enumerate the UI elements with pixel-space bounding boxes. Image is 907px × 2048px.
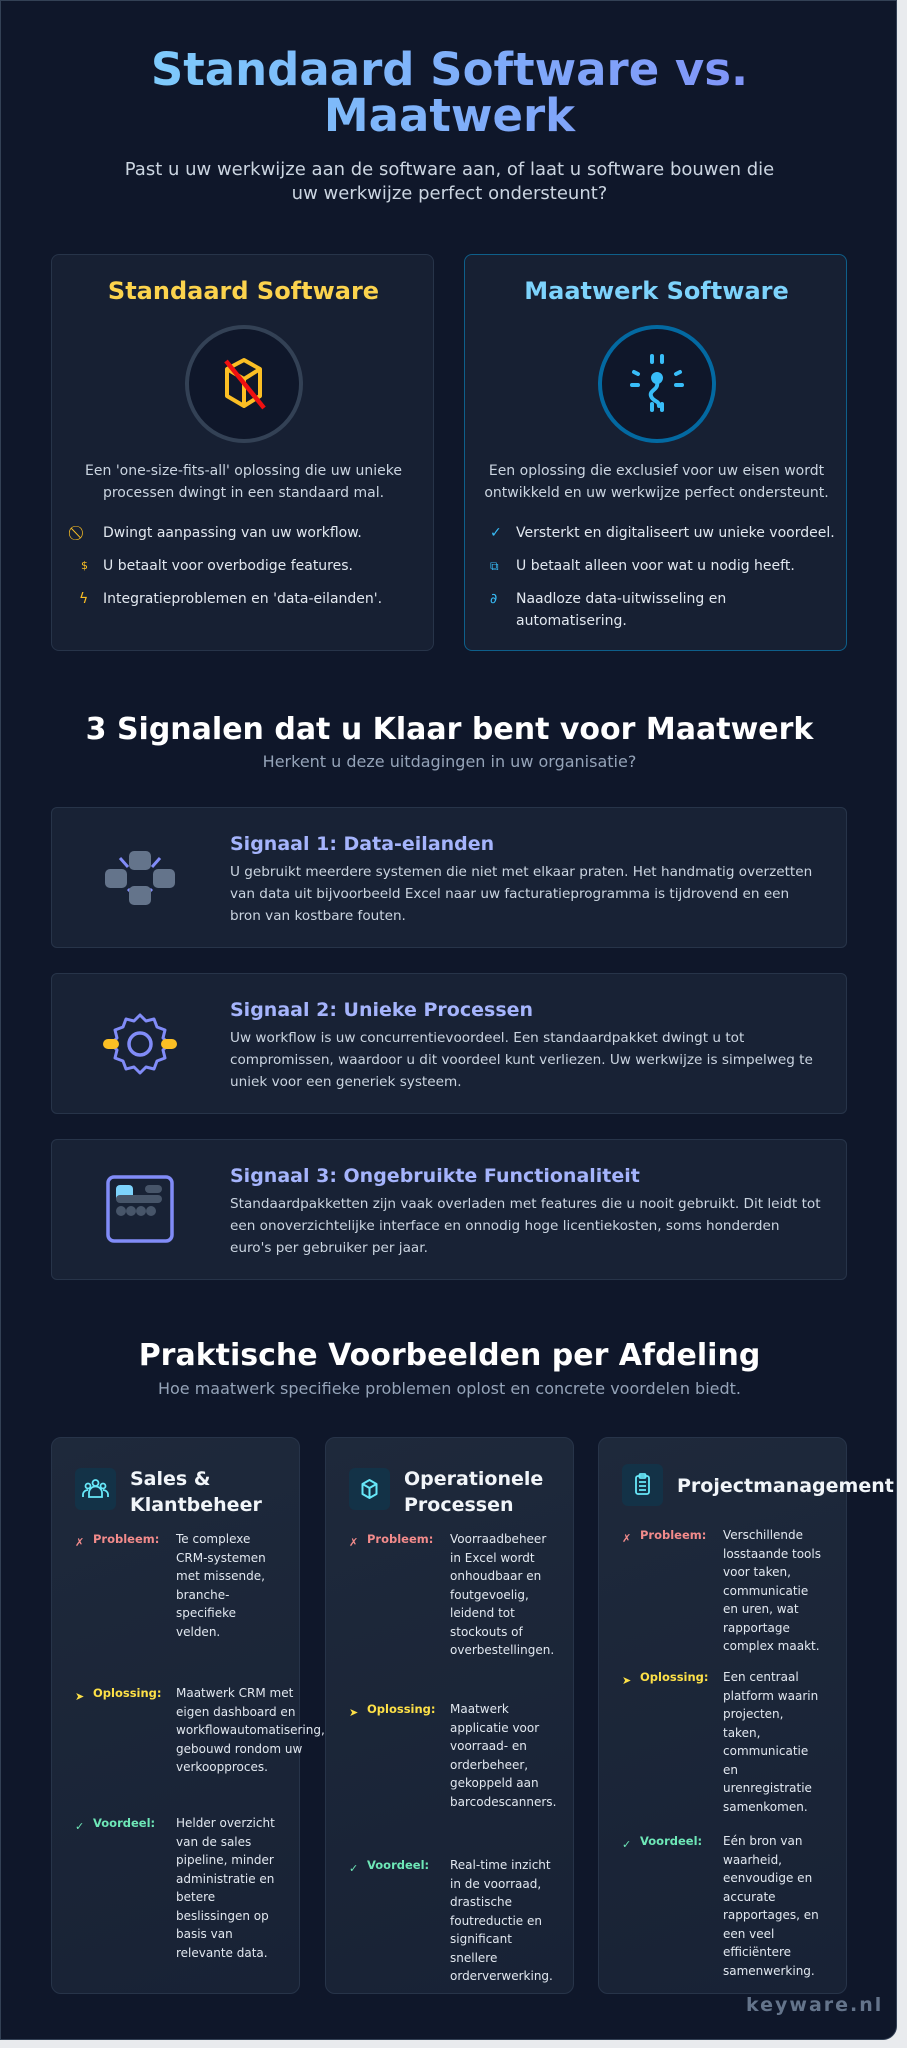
panel: projectmanagement: Projectmanagement [677, 1475, 894, 1497]
panel: sales: Oplossing: [93, 1686, 162, 1700]
panel: signaal 2: Uw workflow is uw concurrentievoordeel. Een standaardpakket dwingt u tot compromissen, waardoor u dit voordeel kunt verliezen. Uw werkwijze is simpelweg te uniek voor een generiek systeem. [230, 1030, 813, 1090]
icon: cluttered interface [106, 1175, 174, 1243]
panel: standaard software [51, 254, 434, 651]
panel: projectmanagement: Voordeel: [640, 1834, 702, 1848]
text: description: Een 'one-size-fits-all' oplossing die uw unieke processen dwingt in een standaard mal. [85, 463, 402, 501]
icon: clipboard [622, 1464, 663, 1506]
panel: signaal 1: U gebruikt meerdere systemen die niet met elkaar praten. Het handmatig overzetten van data uit bijvoorbeeld Excel naar uw facturatieprogramma is tijdrovend en een bron van kostbare fouten. [230, 864, 812, 924]
panel: sales: ➤ [75, 1690, 84, 1703]
list: voordelen: ∂ [490, 591, 497, 607]
panel: signaal 3 [51, 1139, 847, 1280]
heading: maatwerk: Maatwerk Software [524, 277, 789, 305]
panel: projectmanagement: Verschillende losstaande tools voor taken, communicatie en uren, wat rapportage complex maakt. [723, 1528, 821, 1653]
list: voordelen [490, 525, 835, 629]
panel: operationele processen [325, 1437, 574, 1994]
panel: sales [51, 1437, 300, 1994]
panel: sales: Helder overzicht van de sales pipeline, minder administratie en betere beslissingen op basis van relevante data. [176, 1816, 275, 1960]
panel: signaal 3: Signaal 3: Ongebruikte Functionaliteit [230, 1165, 640, 1187]
subheading: voorbeelden: Hoe maatwerk specifieke problemen oplost en concrete voordelen biedt. [158, 1379, 741, 1398]
panel: operationele processen: Oplossing: [367, 1702, 436, 1716]
list: nadelen: $ [81, 559, 88, 572]
list: nadelen: Dwingt aanpassing van uw workflow. [103, 525, 362, 541]
panel: signaal 2 [51, 973, 847, 1114]
panel: operationele processen: Voordeel: [367, 1858, 429, 1872]
panel: projectmanagement: Oplossing: [640, 1670, 709, 1684]
panel: sales: ✓ [75, 1820, 84, 1833]
panel: signaal 1 [51, 807, 847, 948]
panel: sales: Probleem: [93, 1532, 159, 1546]
panel: operationele processen: ✓ [349, 1862, 358, 1875]
heading: voorbeelden: Praktische Voorbeelden per Afdeling [139, 1338, 760, 1373]
panel: operationele processen: Processen [404, 1494, 514, 1516]
list: voordelen: ✓ [490, 525, 502, 541]
panel: projectmanagement: Een centraal platform waarin projecten, taken, communicatie en urenregistratie samenkomen. [723, 1670, 818, 1814]
panel: signaal 3: Standaardpakketten zijn vaak overladen met features die u nooit gebruikt. Dit leidt tot een onoverzichtelijke interface en onnodig hoge licentiekosten, soms honderden euro's per gebruiker per jaar. [230, 1196, 821, 1256]
footer: brand: keyware.nl [746, 1994, 883, 2016]
panel: projectmanagement: Probleem: [640, 1528, 706, 1542]
panel: projectmanagement: Eén bron van waarheid, eenvoudige en accurate rapportages, en een veel efficiëntere samenwerking. [723, 1834, 819, 1978]
icon: crossed box [185, 325, 303, 443]
panel: operationele processen: Maatwerk applicatie voor voorraad- en orderbeheer, gekoppeld aan barcodescanners. [450, 1702, 556, 1808]
panel: operationele processen: ✗ [349, 1536, 358, 1549]
panel: sales: Sales & [130, 1468, 210, 1490]
panel: sales: Maatwerk CRM met eigen dashboard en workflowautomatisering, gebouwd rondom uw verkoopproces. [176, 1686, 325, 1774]
panel: operationele processen: Voorraadbeheer in Excel wordt onhoudbaar en foutgevoelig, leidend tot stockouts of overbestellingen. [450, 1532, 554, 1657]
icon: custom [598, 325, 716, 443]
list: voordelen: Versterkt en digitaliseert uw unieke voordeel. [516, 525, 835, 541]
list: voordelen: ⧉ [490, 559, 499, 573]
panel: operationele processen: Real-time inzicht in de voorraad, drastische foutreductie en significant snellere orderverwerking. [450, 1858, 553, 1983]
heading: signalen: 3 Signalen dat u Klaar bent voor Maatwerk [86, 712, 813, 747]
icon: data islands [105, 851, 175, 905]
panel: maatwerk software [464, 254, 847, 651]
icon: gear [103, 1013, 177, 1075]
text: description: Een oplossing die exclusief voor uw eisen wordt ontwikkeld en uw werkwijze perfect ondersteunt. [484, 463, 829, 501]
subheading: signalen: Herkent u deze uitdagingen in uw organisatie? [263, 752, 636, 771]
subtitle: Past u uw werkwijze aan de software aan, of laat u software bouwen die uw werkwijze perfect ondersteunt? [125, 159, 774, 204]
panel: sales: ✗ [75, 1536, 84, 1549]
panel: operationele processen: ➤ [349, 1706, 358, 1719]
panel: sales: Klantbeheer [130, 1494, 262, 1516]
title: Standaard Software vs. Maatwerk [151, 43, 748, 142]
list: nadelen [68, 525, 382, 607]
list: nadelen: ϟ [79, 591, 88, 607]
panel: signaal 2: Signaal 2: Unieke Processen [230, 999, 533, 1021]
panel: operationele processen: Probleem: [367, 1532, 433, 1546]
panel: projectmanagement: ✓ [622, 1838, 631, 1851]
list: nadelen: U betaalt voor overbodige features. [103, 558, 353, 574]
panel: projectmanagement: ➤ [622, 1674, 631, 1687]
icon: people [75, 1468, 116, 1510]
panel: sales: Voordeel: [93, 1816, 155, 1830]
panel: sales: Te complexe CRM-systemen met missende, branche-specifieke velden. [176, 1532, 266, 1638]
icon: cube [349, 1468, 390, 1510]
list: nadelen: Integratieproblemen en 'data-eilanden'. [103, 591, 382, 607]
list: voordelen: Naadloze data-uitwisseling en automatisering. [516, 591, 726, 629]
panel: signaal 1: Signaal 1: Data-eilanden [230, 833, 494, 855]
panel: operationele processen: Operationele [404, 1468, 543, 1490]
panel: projectmanagement: ✗ [622, 1532, 631, 1545]
panel: projectmanagement [598, 1437, 847, 1994]
heading: standaard: Standaard Software [108, 277, 379, 305]
list: voordelen: U betaalt alleen voor wat u nodig heeft. [516, 558, 795, 574]
